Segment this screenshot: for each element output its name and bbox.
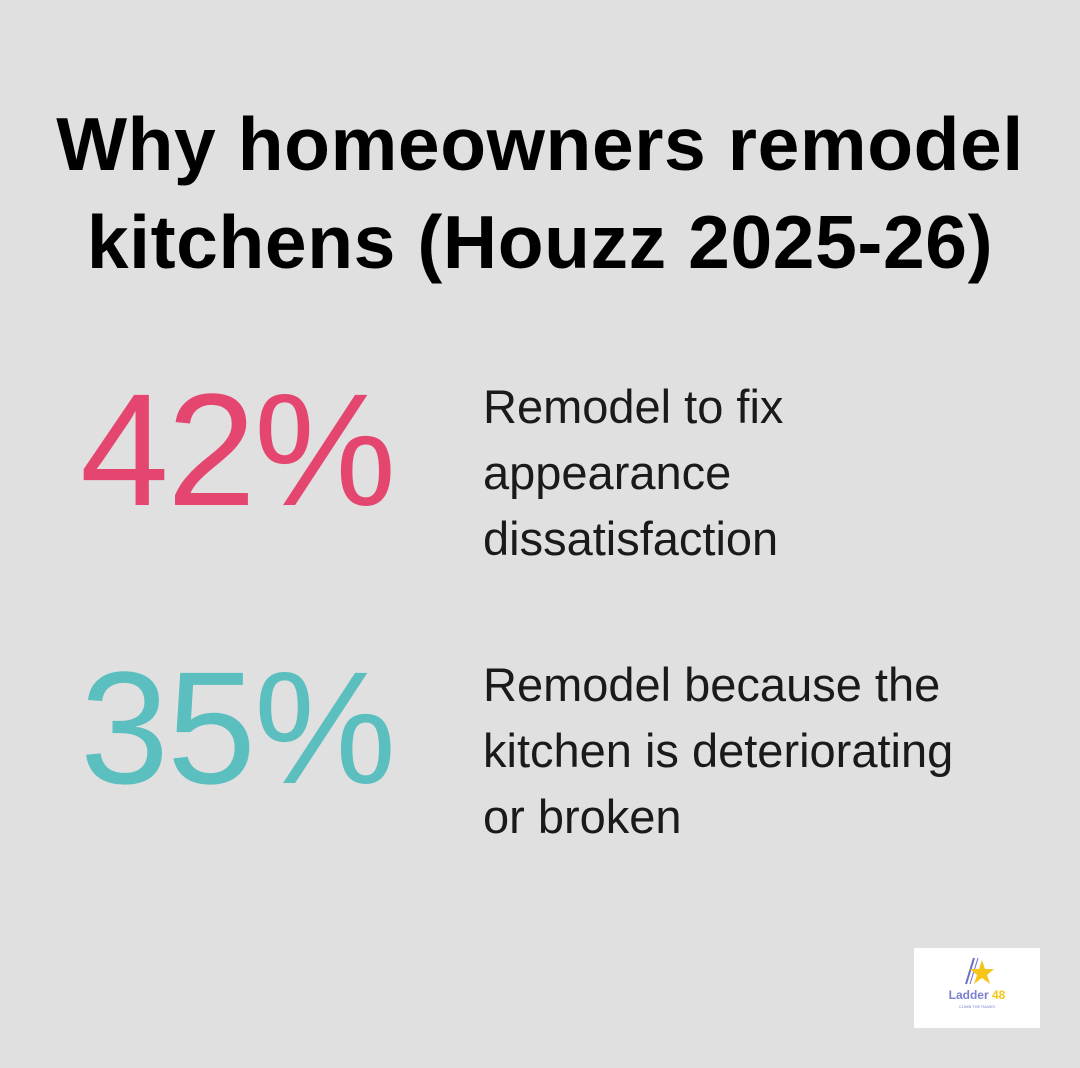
text: 35% description: Remodel because the xyxy=(483,658,940,711)
title: Why homeowners remodel xyxy=(56,102,1024,186)
text: 35% description: kitchen is deteriorating xyxy=(483,724,953,777)
text: 42% description: dissatisfaction xyxy=(483,512,778,565)
stat: 42%: 42% xyxy=(80,360,394,539)
text: 35% description xyxy=(483,658,953,843)
text: 42% description: Remodel to fix xyxy=(483,380,783,433)
logo: Ladder 48: CLIMB THE RANKS xyxy=(959,1004,995,1009)
stat: 35%: 35% xyxy=(80,638,394,817)
text: 35% description: or broken xyxy=(483,790,682,843)
text: 42% description xyxy=(483,380,783,565)
title: kitchens (Houzz 2025-26) xyxy=(87,200,993,284)
text: 42% description: appearance xyxy=(483,446,731,499)
logo: Ladder 48 xyxy=(914,948,1040,1028)
title xyxy=(56,102,1024,284)
logo: Ladder 48: Ladder 48 xyxy=(949,988,1006,1002)
